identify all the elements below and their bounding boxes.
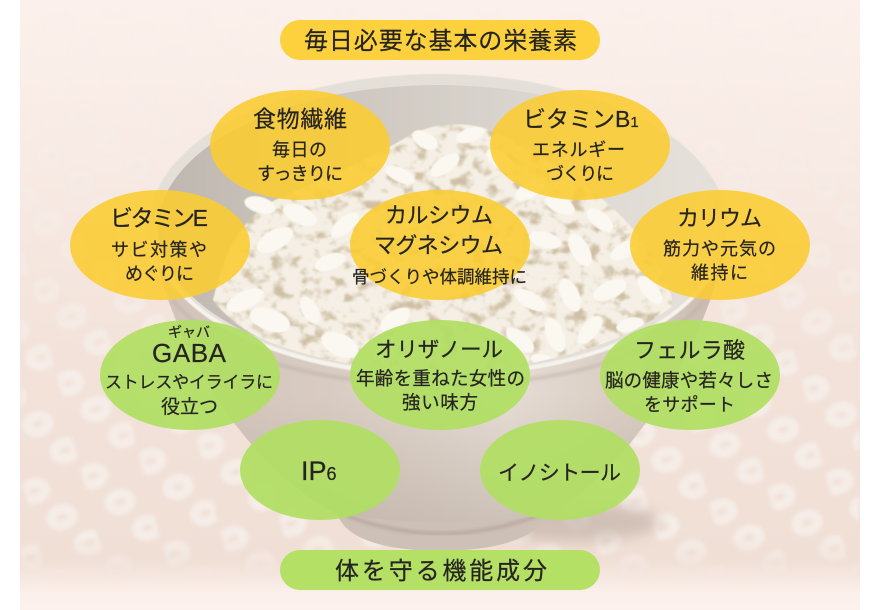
bubble: GABA: GABA	[152, 338, 227, 368]
bubble: vitamin E: サビ対策や	[111, 240, 207, 260]
bubble: potassium	[630, 190, 810, 300]
bubble: dietary fiber	[210, 90, 390, 200]
bubble: vitamin B1: づくりに	[546, 164, 614, 184]
bubble: vitamin E	[70, 190, 250, 300]
bubble: calcium and magnesium: マグネシウム	[374, 233, 503, 258]
photo: rice bowl	[149, 74, 727, 551]
bubble: vitamin B1: エネルギー	[532, 140, 625, 160]
bubble: inositol	[480, 420, 640, 520]
bubble: potassium: カリウム	[677, 206, 762, 231]
bubble: calcium and magnesium: 骨づくりや体調維持に	[352, 267, 527, 287]
bubble: oryzanol	[350, 320, 530, 430]
heading: protective functional components	[280, 550, 600, 590]
bubble: dietary fiber: 食物繊維	[253, 106, 347, 132]
bubble: IP6: IP6	[301, 456, 337, 486]
bubble: GABA	[100, 320, 280, 430]
bubble: ferulic acid: フェルラ酸	[634, 338, 745, 363]
bubble: vitamin B1	[490, 90, 670, 200]
bubble: potassium: 維持に	[691, 263, 748, 283]
bubble: ferulic acid: 脳の健康や若々しさ	[605, 370, 773, 391]
bubble: vitamin B1: ビタミンB1	[523, 106, 639, 132]
bubble: IP6	[240, 420, 400, 520]
bubble: calcium and magnesium: カルシウム	[385, 203, 493, 228]
bubble: vitamin E: ビタミンE	[110, 205, 208, 231]
bubble: dietary fiber: すっきりに	[257, 164, 343, 184]
bubble: ferulic acid: をサポート	[644, 395, 735, 415]
bubble: potassium: 筋力や元気の	[663, 239, 776, 259]
bubble: oryzanol: オリザノール	[375, 338, 503, 362]
heading: protective functional components: 体を守る機能成分	[335, 558, 547, 585]
bubble: GABA: 役立つ	[161, 396, 218, 418]
bubble: GABA: ストレスやイライラに	[105, 373, 273, 392]
bubble: ferulic acid	[600, 320, 780, 430]
bubble: vitamin E: めぐりに	[125, 264, 194, 284]
bubble: oryzanol: 年齢を重ねた女性の	[356, 368, 525, 389]
heading: daily essential nutrients	[280, 20, 600, 60]
bubble: GABA: ギャバ	[168, 324, 210, 340]
bubble: dietary fiber: 毎日の	[272, 140, 327, 160]
bubble: calcium and magnesium	[350, 190, 530, 300]
bubble: inositol: イノシトール	[498, 462, 621, 485]
bubble: oryzanol: 強い味方	[402, 392, 478, 413]
heading: daily essential nutrients: 毎日必要な基本の栄養素	[304, 28, 577, 55]
